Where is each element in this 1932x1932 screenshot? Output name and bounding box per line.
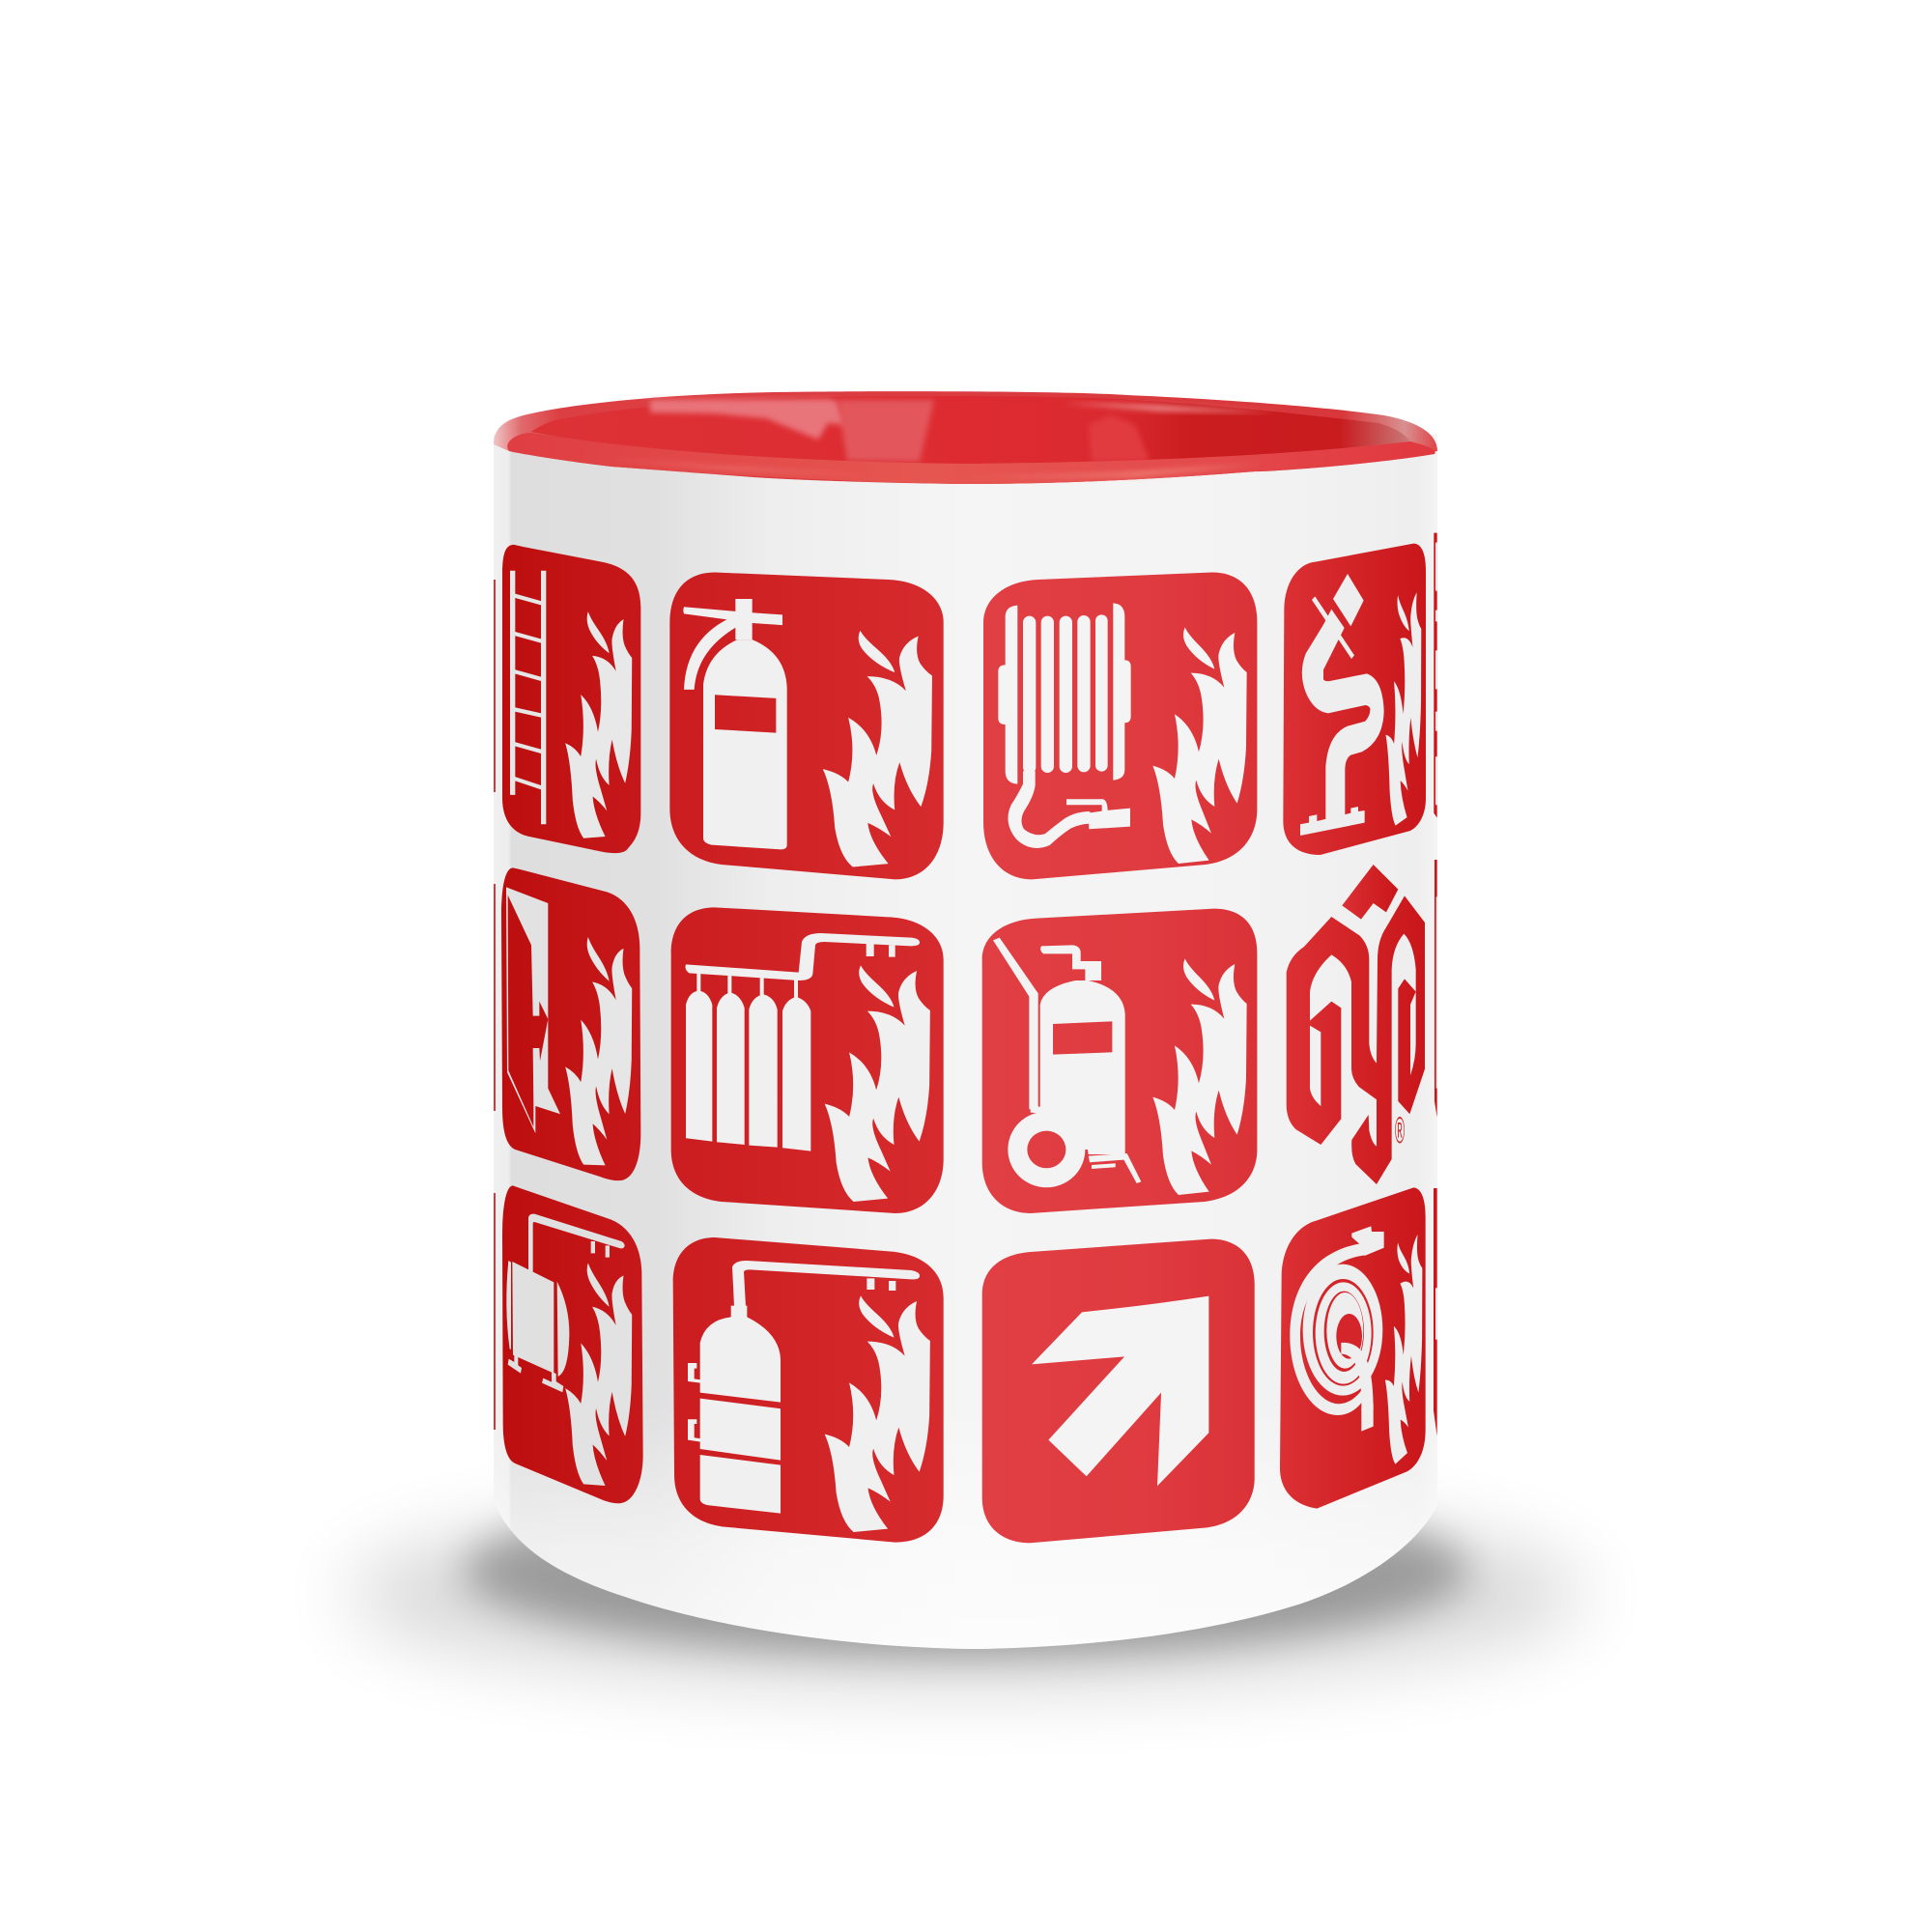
icon: gas cylinder bank and fire <box>671 907 944 1213</box>
icon: ladder and fire <box>502 545 640 853</box>
icon: gas cylinder with pipe and fire <box>673 1237 944 1543</box>
icon: extinguisher and fire <box>669 572 944 879</box>
mug body <box>494 435 1437 1649</box>
icon: direction arrow <box>982 1239 1255 1543</box>
icon: standpipe and fire <box>1283 544 1426 855</box>
right edge sliver row 2 <box>1435 860 1437 1118</box>
logo mark <box>1287 865 1425 1184</box>
icon: wheeled extinguisher and fire <box>982 909 1257 1213</box>
right edge sliver row 3 <box>1434 1188 1437 1436</box>
icon: hose reel and fire <box>983 572 1257 879</box>
icon: exit door and fire <box>501 867 640 1180</box>
logo mark: ® <box>1395 1109 1405 1151</box>
icon: coiled hose and fire <box>1280 1187 1426 1509</box>
mug rim <box>494 391 1437 484</box>
right edge slivers of wrapped pattern <box>1434 533 1437 818</box>
ground shadow <box>348 1483 1584 1686</box>
left edge slivers of wrapped pattern <box>494 580 496 1430</box>
icon: horizontal tank and fire <box>502 1185 643 1503</box>
